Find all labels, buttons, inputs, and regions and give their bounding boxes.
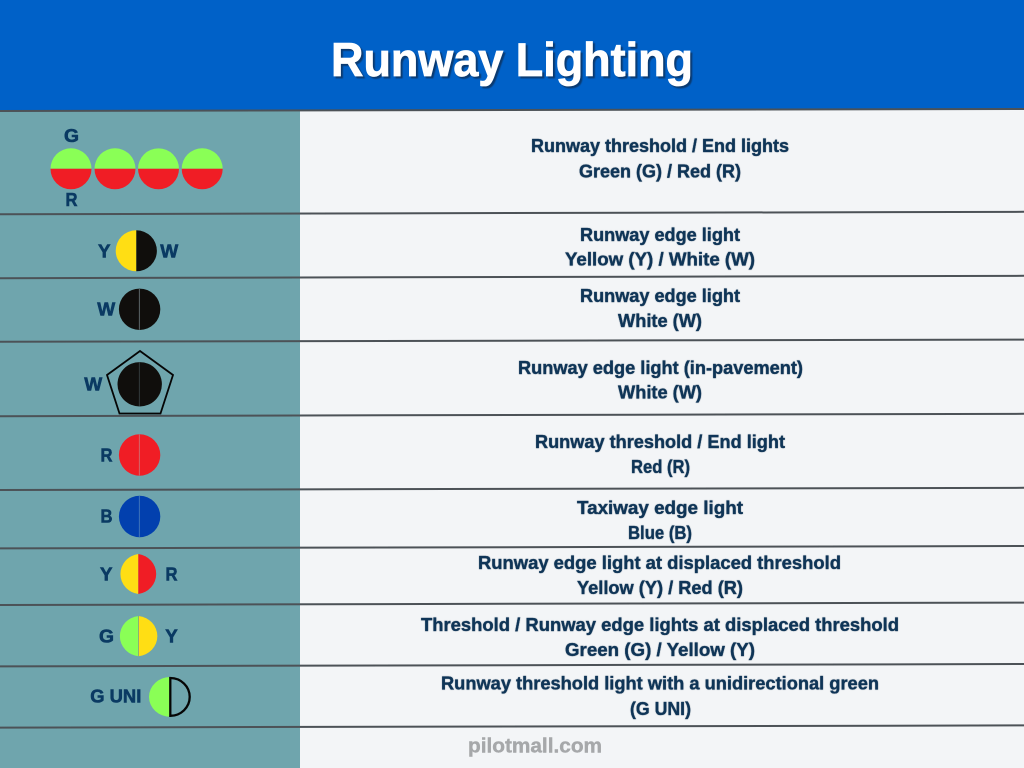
label Y: Y: [100, 563, 113, 584]
label W: W: [84, 374, 103, 395]
title: Runway Lighting: [331, 33, 693, 86]
description: Yellow (Y) / Red (R): [577, 578, 743, 598]
label W: W: [97, 298, 116, 319]
row 3: edge light white: [97, 286, 740, 331]
row 4: in-pavement edge light: [84, 351, 803, 414]
label G: G: [64, 125, 79, 146]
icon: unidirectional green light: [149, 677, 190, 717]
row 9: unidirectional green: [90, 674, 879, 719]
description: [441, 674, 879, 719]
header band: [0, 0, 1024, 110]
description: Yellow (Y) / White (W): [565, 250, 755, 270]
description: [478, 553, 841, 598]
description: Green (G) / Yellow (Y): [565, 640, 755, 660]
description: [535, 432, 785, 477]
row 2: edge light yellow white: [98, 225, 755, 271]
label G: G: [99, 625, 114, 646]
watermark: pilotmall.com: [468, 736, 602, 758]
label Y: Y: [165, 625, 178, 646]
icon: pentagon with white light: [107, 351, 173, 414]
row 7: displaced threshold edge light: [100, 553, 841, 598]
description: [565, 225, 755, 270]
description: Runway edge light at displaced threshold: [478, 553, 841, 573]
description: Blue (B): [628, 523, 692, 543]
description: Runway edge light: [580, 286, 740, 306]
icon: yellow and red light: [120, 554, 156, 594]
description: Runway threshold / End light: [535, 432, 785, 452]
description: Runway edge light: [580, 225, 740, 245]
description: Threshold / Runway edge lights at displaced threshold: [421, 615, 899, 635]
description: [421, 615, 899, 660]
description: Runway threshold light with a unidirectional green: [441, 674, 879, 694]
icon: four green and red lights: [50, 148, 223, 189]
description: Red (R): [631, 457, 690, 477]
label W: W: [160, 240, 179, 261]
icon: red light: [119, 434, 160, 476]
description: Runway edge light (in-pavement): [518, 358, 803, 378]
label Y: Y: [98, 240, 111, 261]
label B: B: [100, 505, 112, 526]
icon: green and yellow light: [120, 616, 157, 656]
description: Taxiway edge light: [577, 498, 743, 518]
description: [580, 286, 740, 331]
description: White (W): [618, 382, 702, 402]
description: Green (G) / Red (R): [579, 162, 741, 182]
label R: R: [66, 189, 78, 210]
label R: R: [166, 563, 178, 584]
icon: yellow and white light: [116, 230, 157, 271]
label G UNI: G UNI: [90, 685, 141, 706]
panel: left symbol column: [0, 110, 300, 768]
description: White (W): [618, 311, 702, 331]
icon: white light: [119, 289, 160, 330]
row 8: threshold and edge lights: [99, 615, 899, 660]
label R: R: [100, 445, 112, 466]
description: [531, 136, 789, 182]
description: [518, 358, 803, 402]
icon: blue light: [119, 496, 160, 537]
description: Runway threshold / End lights: [531, 136, 789, 156]
description: (G UNI): [630, 699, 691, 719]
row 5: threshold end light red: [100, 432, 785, 477]
description: [577, 498, 743, 543]
row 6: taxiway edge light: [100, 496, 743, 543]
row 1: threshold / end lights: [50, 125, 789, 210]
